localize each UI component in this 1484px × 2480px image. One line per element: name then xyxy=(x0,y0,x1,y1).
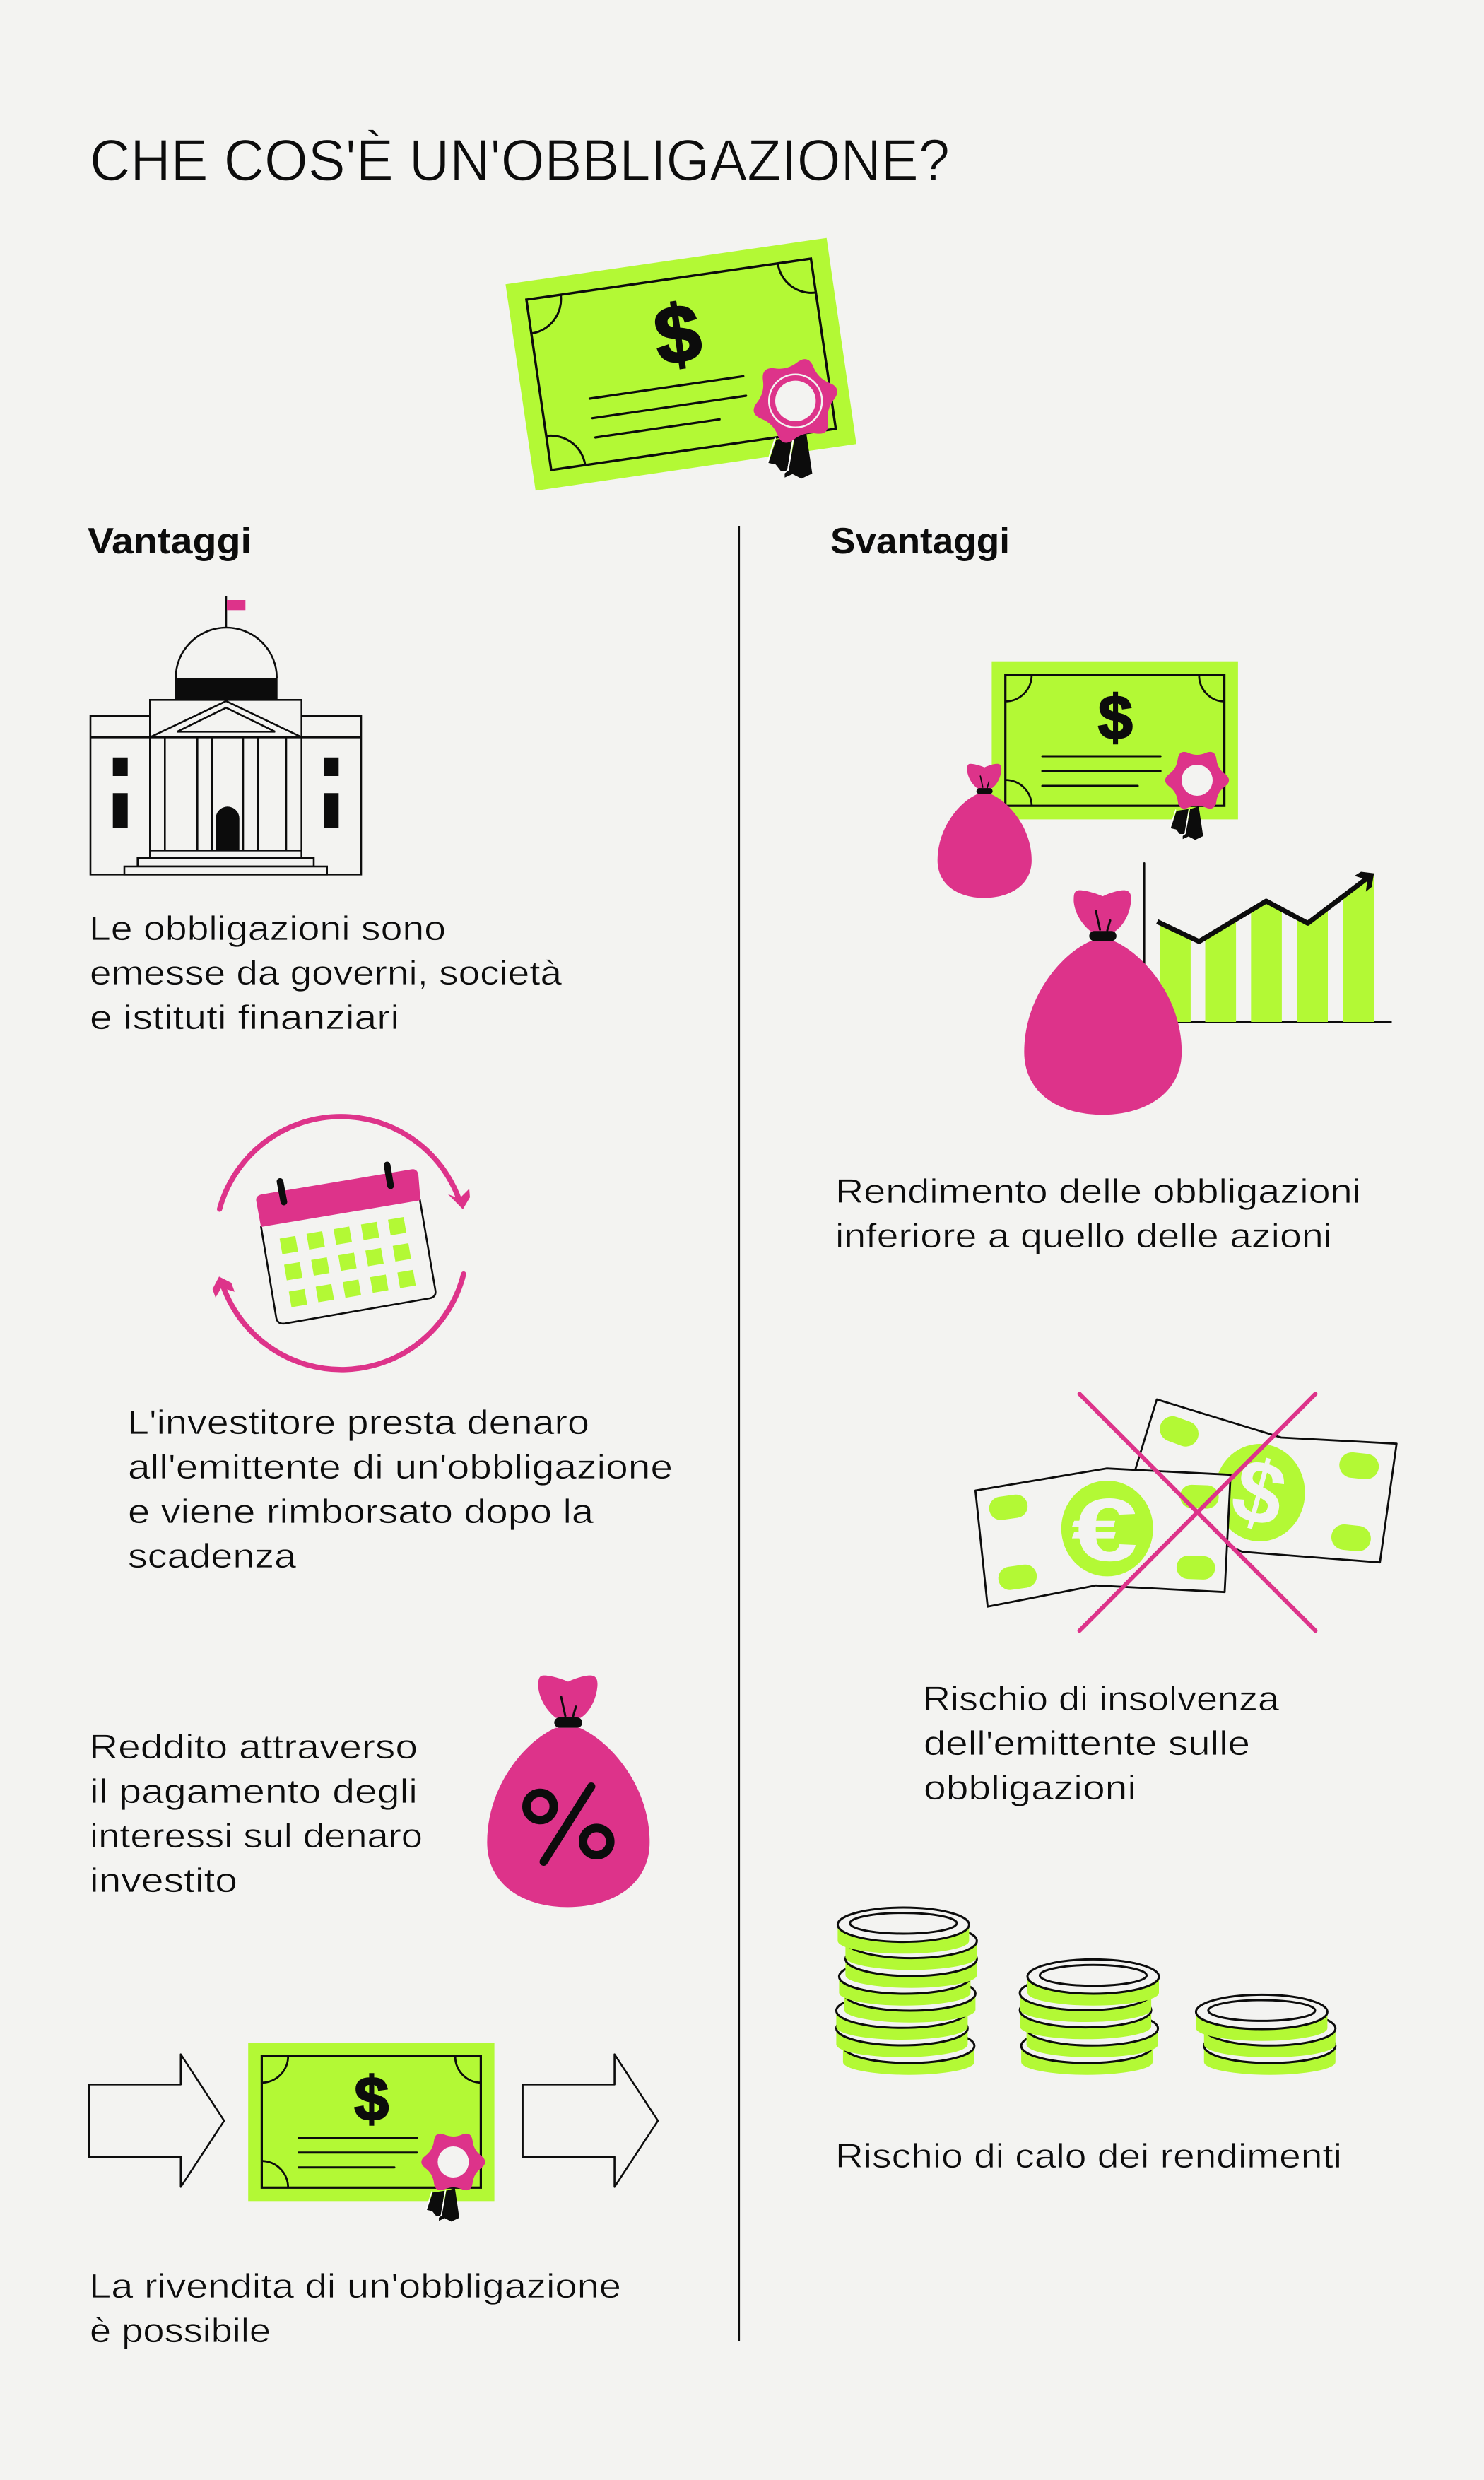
text: default risk: Rischio di insolvenza xyxy=(923,1681,1279,1718)
large money bag xyxy=(1024,891,1182,1115)
bond certificate xyxy=(991,662,1238,840)
icon: resale bond certificate: $ xyxy=(354,2064,389,2134)
calendar page xyxy=(261,1199,435,1324)
icon: calendar with cycle arrows xyxy=(213,1117,470,1370)
door and windows xyxy=(113,758,338,850)
dollar banknote xyxy=(1136,1399,1396,1563)
text: interest income: il pagamento degli xyxy=(90,1773,418,1811)
central vertical divider xyxy=(738,526,740,2341)
text: default risk: obbligazioni xyxy=(924,1770,1136,1807)
calendar header xyxy=(256,1169,420,1227)
title: CHE COS'È UN'OBBLIGAZIONE? xyxy=(90,127,950,193)
heading: Vantaggi: Vantaggi xyxy=(88,521,252,562)
flag xyxy=(226,596,245,628)
icon: percent money bag xyxy=(487,1676,649,1907)
euro banknote xyxy=(975,1469,1230,1606)
wings and portico xyxy=(90,700,361,874)
medium coin stack xyxy=(1020,1959,1159,2075)
small money bag xyxy=(938,764,1032,898)
text: interest income: investito xyxy=(90,1862,237,1900)
heading: Svantaggi: Svantaggi xyxy=(830,521,1010,562)
short coin stack xyxy=(1196,1994,1336,2075)
growth chart xyxy=(1144,863,1391,1022)
euro banknote: € xyxy=(1071,1480,1138,1580)
cycle arrows xyxy=(213,1117,470,1370)
text: lower yield: inferiore a quello delle azioni xyxy=(835,1218,1332,1255)
text: issuers: emesse da governi, società xyxy=(90,955,562,992)
icon: main tilted bond certificate: $ xyxy=(649,287,707,382)
icon: declining coin stacks xyxy=(836,1908,1336,2075)
text: lower yield: Rendimento delle obbligazioni xyxy=(835,1173,1361,1211)
text: lending and repayment: e viene rimborsato dopo la xyxy=(128,1493,594,1531)
text: issuers: e istituti finanziari xyxy=(90,999,399,1037)
icon: arrow into certificate xyxy=(89,2055,224,2187)
icon: resale bond certificate xyxy=(248,2043,495,2221)
text: default risk: dell'emittente sulle xyxy=(924,1725,1250,1763)
text: falling returns: Rischio di calo dei rendimenti xyxy=(835,2138,1342,2175)
icon: bond with small bag versus chart with large bag xyxy=(938,662,1391,1115)
text: lending and repayment: all'emittente di un'obbligazione xyxy=(128,1449,673,1486)
pink cross xyxy=(1080,1394,1315,1630)
icon: crossed-out banknotes xyxy=(975,1394,1396,1630)
dome xyxy=(175,628,278,700)
calendar days xyxy=(280,1217,416,1307)
text: lending and repayment: scadenza xyxy=(128,1538,296,1575)
icon: arrow out of certificate xyxy=(523,2055,658,2187)
text: interest income: interessi sul denaro xyxy=(90,1818,423,1855)
dollar banknote: $ xyxy=(1223,1438,1296,1547)
tall coin stack xyxy=(836,1908,977,2075)
icon: government building xyxy=(90,596,361,874)
text: lending and repayment: L'investitore presta denaro xyxy=(127,1404,589,1442)
text: resale: è possibile xyxy=(90,2312,271,2350)
calendar rings xyxy=(280,1165,391,1202)
text: resale: La rivendita di un'obbligazione xyxy=(89,2268,621,2305)
bond certificate: $ xyxy=(1098,683,1133,752)
percent sign xyxy=(526,1787,611,1862)
text: interest income: Reddito attraverso xyxy=(89,1729,418,1766)
text: issuers: Le obbligazioni sono xyxy=(89,910,446,948)
icon: main tilted bond certificate xyxy=(505,238,856,490)
